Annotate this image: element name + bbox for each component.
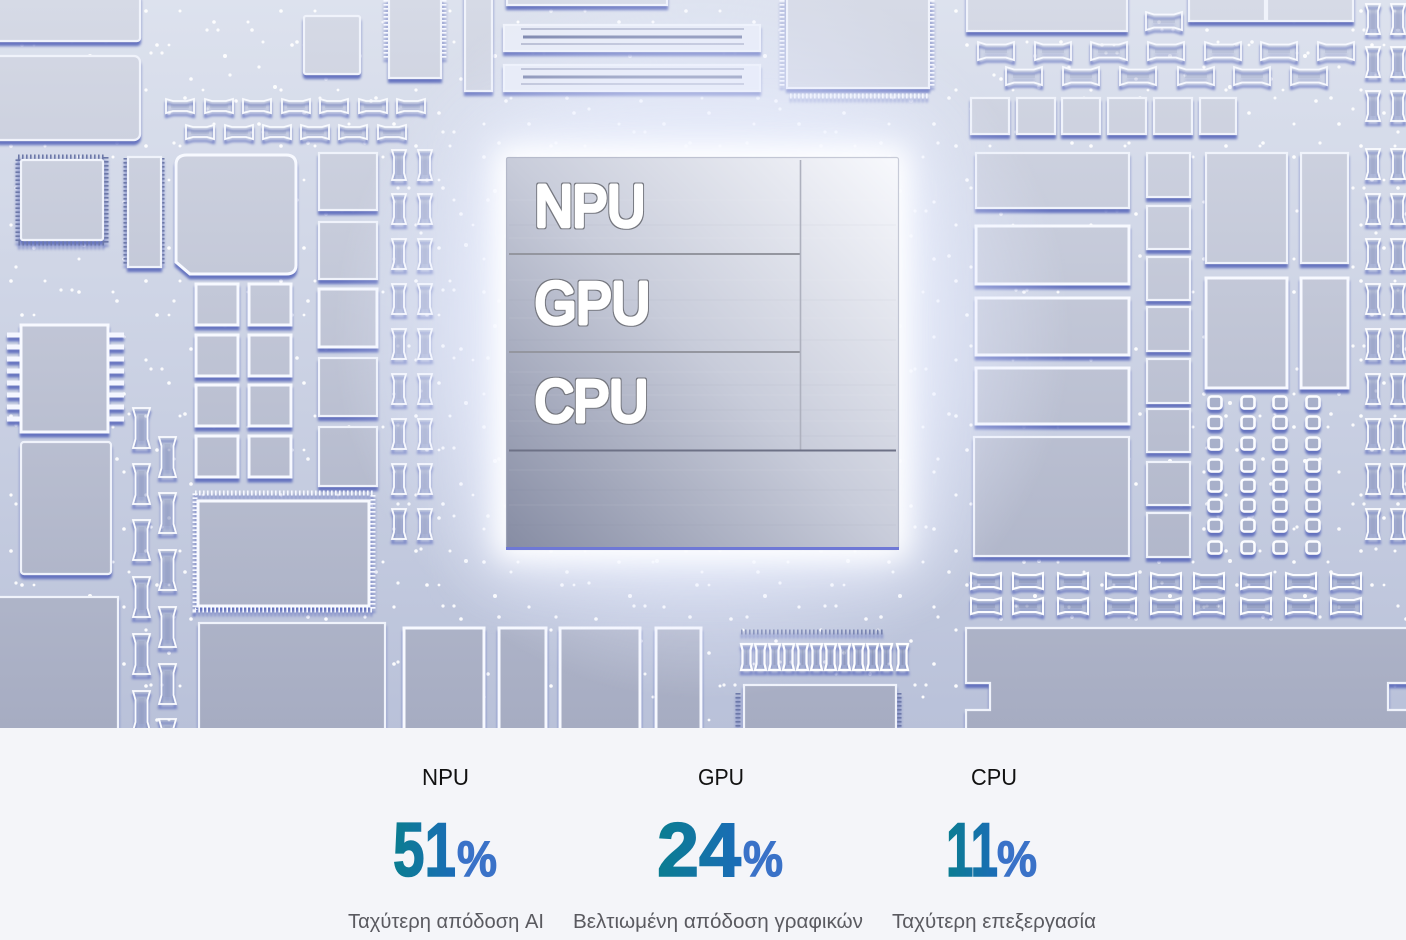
chips: stacked wide modules (976, 153, 1129, 424)
panel: statistics strip (0, 728, 1406, 940)
connector: top partial (507, 0, 667, 5)
chip: small top square (304, 16, 360, 74)
chip: QFP left (18, 157, 106, 243)
heading: GPU: GPU (698, 764, 744, 790)
lighting: chip glow (490, 141, 914, 565)
percent sign: % (997, 831, 1037, 887)
panel: top center connectors (504, 0, 932, 96)
chip: left QFN with side pins (7, 325, 124, 432)
chip body (506, 157, 899, 550)
stat: NPU (348, 764, 544, 933)
chips: right tall modules (1206, 153, 1348, 388)
capacitor rows: lower right (971, 573, 1361, 614)
label: CPU: CPU (535, 369, 648, 434)
chips: bevel row (971, 98, 1236, 134)
value: 11: 11 (946, 808, 998, 893)
caption: Ταχύτερη απόδοση AI (348, 911, 544, 933)
chip: top-left module (0, 0, 140, 41)
heading: CPU: CPU (971, 764, 1017, 790)
label: GPU: GPU (535, 271, 650, 336)
capacitor rows: upper right (978, 12, 1354, 85)
capacitor row: upper left (166, 99, 425, 139)
percent sign: % (743, 831, 783, 887)
chips: bright modules bottom center (404, 628, 701, 738)
chip: top QFP (782, 0, 932, 96)
stat: CPU (892, 764, 1096, 933)
solder dot field secondary (0, 0, 1406, 730)
panel: circuit board background (0, 0, 1406, 730)
chip: bottom right long module (966, 628, 1406, 738)
caption: Ταχύτερη επεξεργασία (892, 911, 1096, 933)
chip: top right module (967, 0, 1127, 31)
connector: lower slot (504, 65, 760, 91)
chip: large left module (0, 56, 140, 140)
chip: top DIP package (386, 0, 444, 78)
value: 51: 51 (393, 808, 456, 893)
label: NPU: NPU (535, 174, 645, 239)
capacitors: far right pairs (1366, 4, 1405, 539)
chip: large dark module (974, 437, 1129, 556)
chip: bottom-left wide module (199, 623, 385, 738)
solder dot field (0, 0, 1406, 730)
chip: narrow pinned IC (126, 157, 162, 267)
heading: NPU: NPU (422, 764, 469, 790)
chip: bottom center package (738, 685, 899, 735)
lighting: chip inner glow (498, 149, 906, 557)
chip: large QFP lower left (195, 493, 373, 610)
capacitors: left double column (133, 408, 176, 759)
connector: upper slot (504, 25, 760, 51)
chip: top vertical module (465, 0, 492, 91)
chip: bottom-left module (0, 597, 118, 737)
chips: small square grid (196, 284, 291, 477)
panel: right components (966, 0, 1406, 738)
caption: Βελτιωμένη απόδοση γραφικών (573, 911, 863, 933)
chips: top right flat modules (1189, 0, 1353, 21)
pads: small grid (1208, 396, 1320, 554)
chip bottom edge (506, 547, 899, 550)
capacitors: vertical pairs (392, 150, 432, 539)
panel: central processor chip (506, 157, 899, 550)
chip: large rounded square (176, 155, 296, 274)
value: 24: 24 (657, 808, 741, 893)
capacitor row: bottom center (741, 632, 908, 670)
stat: GPU (573, 764, 863, 933)
chips: square column (1147, 153, 1190, 557)
chip outline (506, 158, 898, 550)
section dividers (509, 160, 896, 450)
panel: left components (0, 0, 908, 759)
chips: bevel column (319, 153, 377, 486)
lighting: central halo (0, 0, 1406, 730)
percent sign: % (457, 831, 497, 887)
brushed metal lines (509, 200, 896, 525)
chip: left tall module (21, 442, 111, 574)
